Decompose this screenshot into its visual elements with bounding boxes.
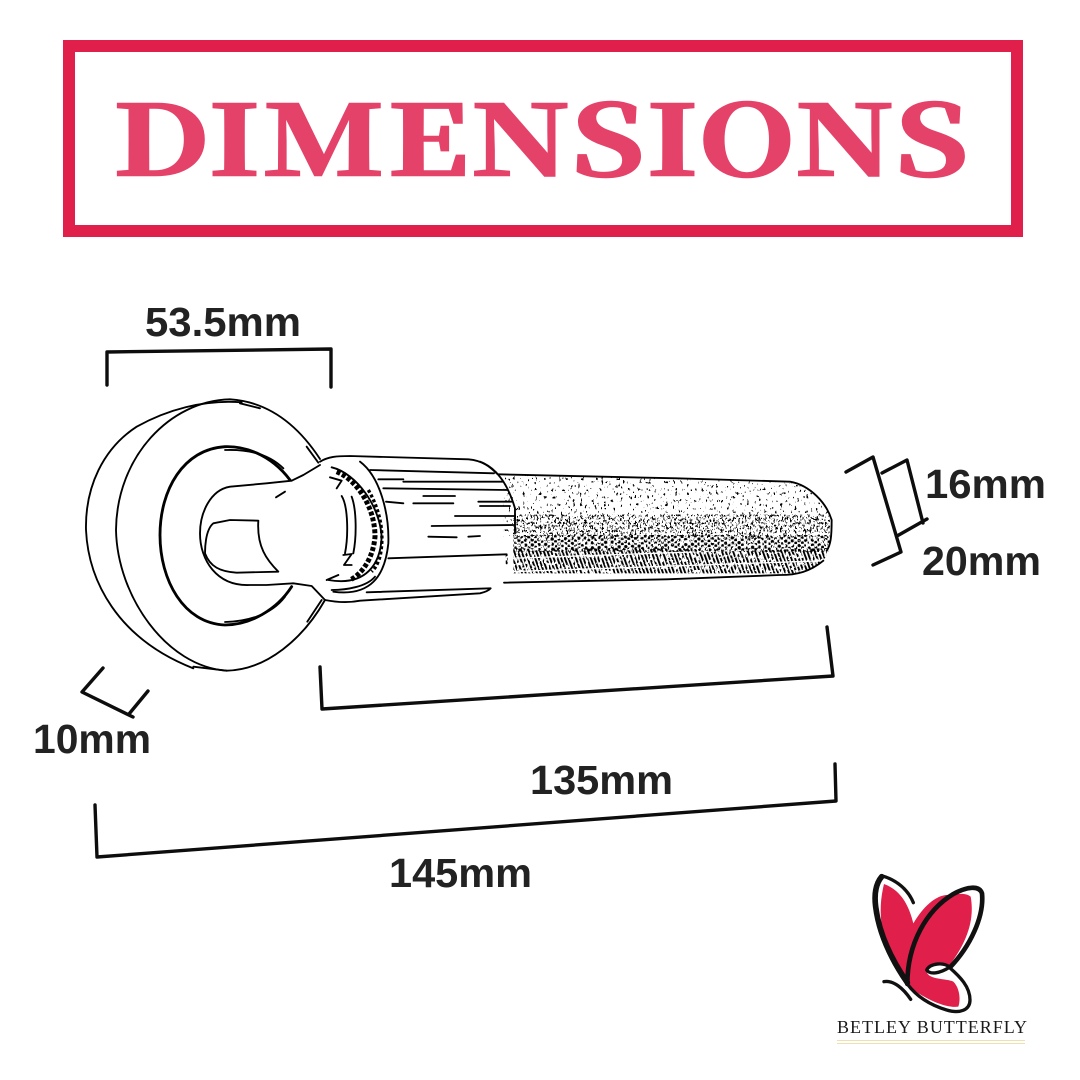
dimension: 20mm outer and 16mm inner grip (846, 457, 1046, 584)
handle rose plate (86, 399, 325, 671)
knurled handle shaft (480, 462, 837, 583)
dimension: 20mm outer and 16mm inner grip: 20mm (922, 538, 1041, 584)
spindle and mortice (200, 481, 325, 600)
brand name: BETLEY BUTTERFLY (837, 1017, 1027, 1037)
collar and fluted grip (320, 456, 515, 602)
dimension: 53.5mm width: 53.5mm (145, 299, 301, 345)
dimension: 10mm plate depth: 10mm (33, 716, 151, 762)
icon: butterfly (875, 876, 982, 1012)
dimension: 135mm grip length: 135mm (530, 757, 673, 803)
title box (69, 46, 1017, 231)
title frame (69, 46, 1017, 231)
title text: DIMENSIONS (113, 66, 971, 203)
dimension: 20mm outer and 16mm inner grip: 16mm (925, 461, 1046, 507)
logo: Betley Butterfly (837, 876, 1027, 1044)
door handle illustration (86, 399, 837, 671)
dimension: 135mm grip length (320, 627, 833, 803)
dimension: 145mm total length (95, 764, 836, 896)
dimension: 10mm plate depth (33, 668, 151, 762)
dimension: 145mm total length: 145mm (389, 850, 532, 896)
dimension: 53.5mm width (107, 299, 331, 387)
